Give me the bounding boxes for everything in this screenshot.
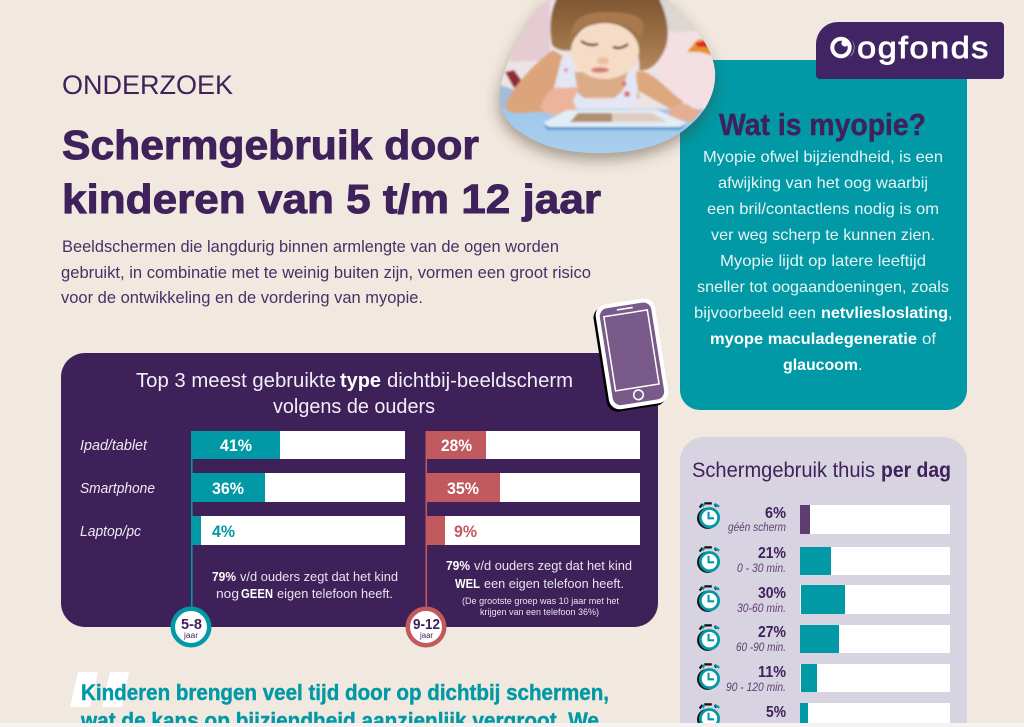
row: 5% bbox=[697, 703, 950, 727]
myopie explanation text: bijvoorbeeld een bbox=[694, 305, 816, 322]
panel: schermgebruik thuis per dag bbox=[680, 437, 967, 727]
row: 11% 90-120 min: 90 - 120 min. bbox=[726, 680, 786, 694]
row: 27% 60-90 min: 60 -90 min. bbox=[736, 640, 786, 654]
title: kinderen van 5 t/m 12 jaar bbox=[62, 176, 601, 222]
logo: oogfonds bbox=[816, 22, 1004, 79]
bar chart: 5-8 jaar: 41% bbox=[220, 437, 252, 455]
heading: wat is myopie: Wat is myopie? bbox=[719, 107, 926, 142]
row: 30% 30-60 min: 30% bbox=[758, 585, 786, 602]
bar chart: 5-8 jaar bbox=[191, 431, 405, 611]
myopie explanation text: sneller tot oogaandoeningen, zoals bbox=[697, 279, 949, 296]
caption: 9-12 jaar bbox=[446, 558, 632, 617]
intro text: voor de ontwikkeling en de vordering van myopie. bbox=[61, 289, 423, 307]
bar chart: 9-12 jaar bbox=[426, 431, 640, 611]
bar chart: 5-8 jaar: 36% bbox=[212, 480, 244, 498]
row: 21% 0-30 min: 0 - 30 min. bbox=[737, 561, 786, 575]
myopie explanation text: glaucoom bbox=[783, 357, 858, 374]
icon: smartphone bbox=[592, 297, 670, 413]
caption: 5-8 jaar: GEEN bbox=[241, 586, 273, 601]
caption: 9-12 jaar: een eigen telefoon heeft. bbox=[484, 576, 624, 591]
badge: 9-12 jaar bbox=[408, 609, 444, 645]
panel heading: per dag bbox=[881, 459, 951, 482]
row labels: Ipad/tablet bbox=[80, 437, 148, 454]
caption: 5-8 jaar bbox=[212, 569, 398, 601]
caption: 9-12 jaar: (De grootste groep was 10 jaar met het bbox=[462, 596, 619, 606]
chart heading: dichtbij-beeldscherm bbox=[387, 370, 573, 392]
caption: 9-12 jaar: 79% bbox=[446, 558, 470, 573]
intro text: Beeldschermen die langdurig binnen armlengte van de ogen worden bbox=[62, 238, 559, 256]
chart heading bbox=[136, 370, 573, 418]
row labels: Laptop/pc bbox=[80, 523, 141, 540]
row: 6% geen scherm: géén scherm bbox=[728, 520, 786, 534]
row: 11% 90-120 min: 11% bbox=[758, 664, 786, 681]
title: Schermgebruik door bbox=[62, 122, 479, 168]
badge: 5-8 jaar: jaar bbox=[183, 631, 198, 640]
bar chart: 9-12 jaar: 9% bbox=[454, 523, 477, 541]
myopie explanation text: ver weg scherp te kunnen zien. bbox=[711, 227, 935, 244]
chart heading: Top 3 meest gebruikte bbox=[136, 370, 336, 392]
myopie explanation text: Myopie ofwel bijziendheid, is een bbox=[703, 149, 943, 166]
myopie explanation text: netvliesloslating bbox=[821, 305, 948, 322]
bar chart: 5-8 jaar: 4% bbox=[212, 523, 235, 541]
caption: 9-12 jaar: WEL bbox=[455, 576, 480, 591]
myopie explanation text: afwijking van het oog waarbij bbox=[718, 175, 928, 192]
panel: wat is myopie bbox=[680, 60, 967, 410]
intro text bbox=[61, 238, 591, 307]
row: 30% 30-60 min: 30-60 min. bbox=[737, 601, 786, 615]
row: 11% 90-120 min bbox=[697, 664, 950, 694]
badge: 9-12 jaar: jaar bbox=[419, 631, 433, 640]
row: 6% geen scherm: 6% bbox=[765, 505, 786, 522]
title bbox=[62, 122, 601, 222]
myopie explanation text: een bril/contactlens nodig is om bbox=[707, 201, 939, 218]
chart heading: volgens de ouders bbox=[273, 396, 435, 418]
chart heading: type bbox=[340, 370, 381, 392]
caption: 5-8 jaar: 79% bbox=[212, 569, 236, 584]
logo: oogfonds: Oogfonds bbox=[829, 30, 990, 65]
caption: 5-8 jaar: eigen telefoon heeft. bbox=[277, 586, 393, 601]
quote text: Kinderen brengen veel tijd door op dichtbij schermen, bbox=[81, 680, 609, 705]
row: 5%: 5% bbox=[766, 704, 786, 721]
heading label: onderzoek: ONDERZOEK bbox=[62, 70, 233, 100]
icon: quotation marks bbox=[70, 672, 129, 707]
caption: 5-8 jaar: v/d ouders zegt dat het kind bbox=[240, 569, 398, 584]
panel heading: Schermgebruik thuis bbox=[692, 459, 875, 482]
badge: 5-8 jaar: 5-8 bbox=[181, 616, 202, 633]
myopie explanation text bbox=[694, 149, 952, 374]
row: 27% 60-90 min: 27% bbox=[758, 624, 786, 641]
badge: 5-8 jaar bbox=[173, 609, 209, 645]
myopie explanation text: . bbox=[858, 357, 862, 374]
bar chart: 9-12 jaar: 35% bbox=[447, 480, 479, 498]
badge: 9-12 jaar: 9-12 bbox=[413, 616, 440, 633]
panel: top 3 type beeldscherm bbox=[61, 353, 658, 627]
myopie explanation text: , bbox=[948, 305, 952, 322]
row: 21% 0-30 min: 21% bbox=[758, 545, 786, 562]
caption: 5-8 jaar: nog bbox=[216, 586, 239, 601]
row labels bbox=[80, 437, 155, 540]
row: 21% 0-30 min bbox=[697, 545, 950, 575]
intro text: gebruikt, in combinatie met te weinig buiten zijn, vormen een groot risico bbox=[61, 264, 591, 282]
caption: 9-12 jaar: krijgen van een telefoon 36%) bbox=[480, 607, 599, 617]
caption: 9-12 jaar: v/d ouders zegt dat het kind bbox=[474, 558, 632, 573]
photo: child with tablet bbox=[495, 0, 720, 156]
quote text bbox=[80, 680, 609, 727]
row: 27% 60-90 min bbox=[697, 624, 950, 654]
bar chart: 9-12 jaar: 28% bbox=[441, 437, 472, 455]
myopie explanation text: myope maculadegeneratie bbox=[710, 331, 917, 348]
myopie explanation text: Myopie lijdt op latere leeftijd bbox=[720, 253, 926, 270]
row labels: Smartphone bbox=[80, 480, 155, 497]
row: 6% geen scherm bbox=[697, 503, 950, 534]
row: 30% 30-60 min bbox=[697, 585, 950, 615]
myopie explanation text: of bbox=[922, 331, 937, 348]
